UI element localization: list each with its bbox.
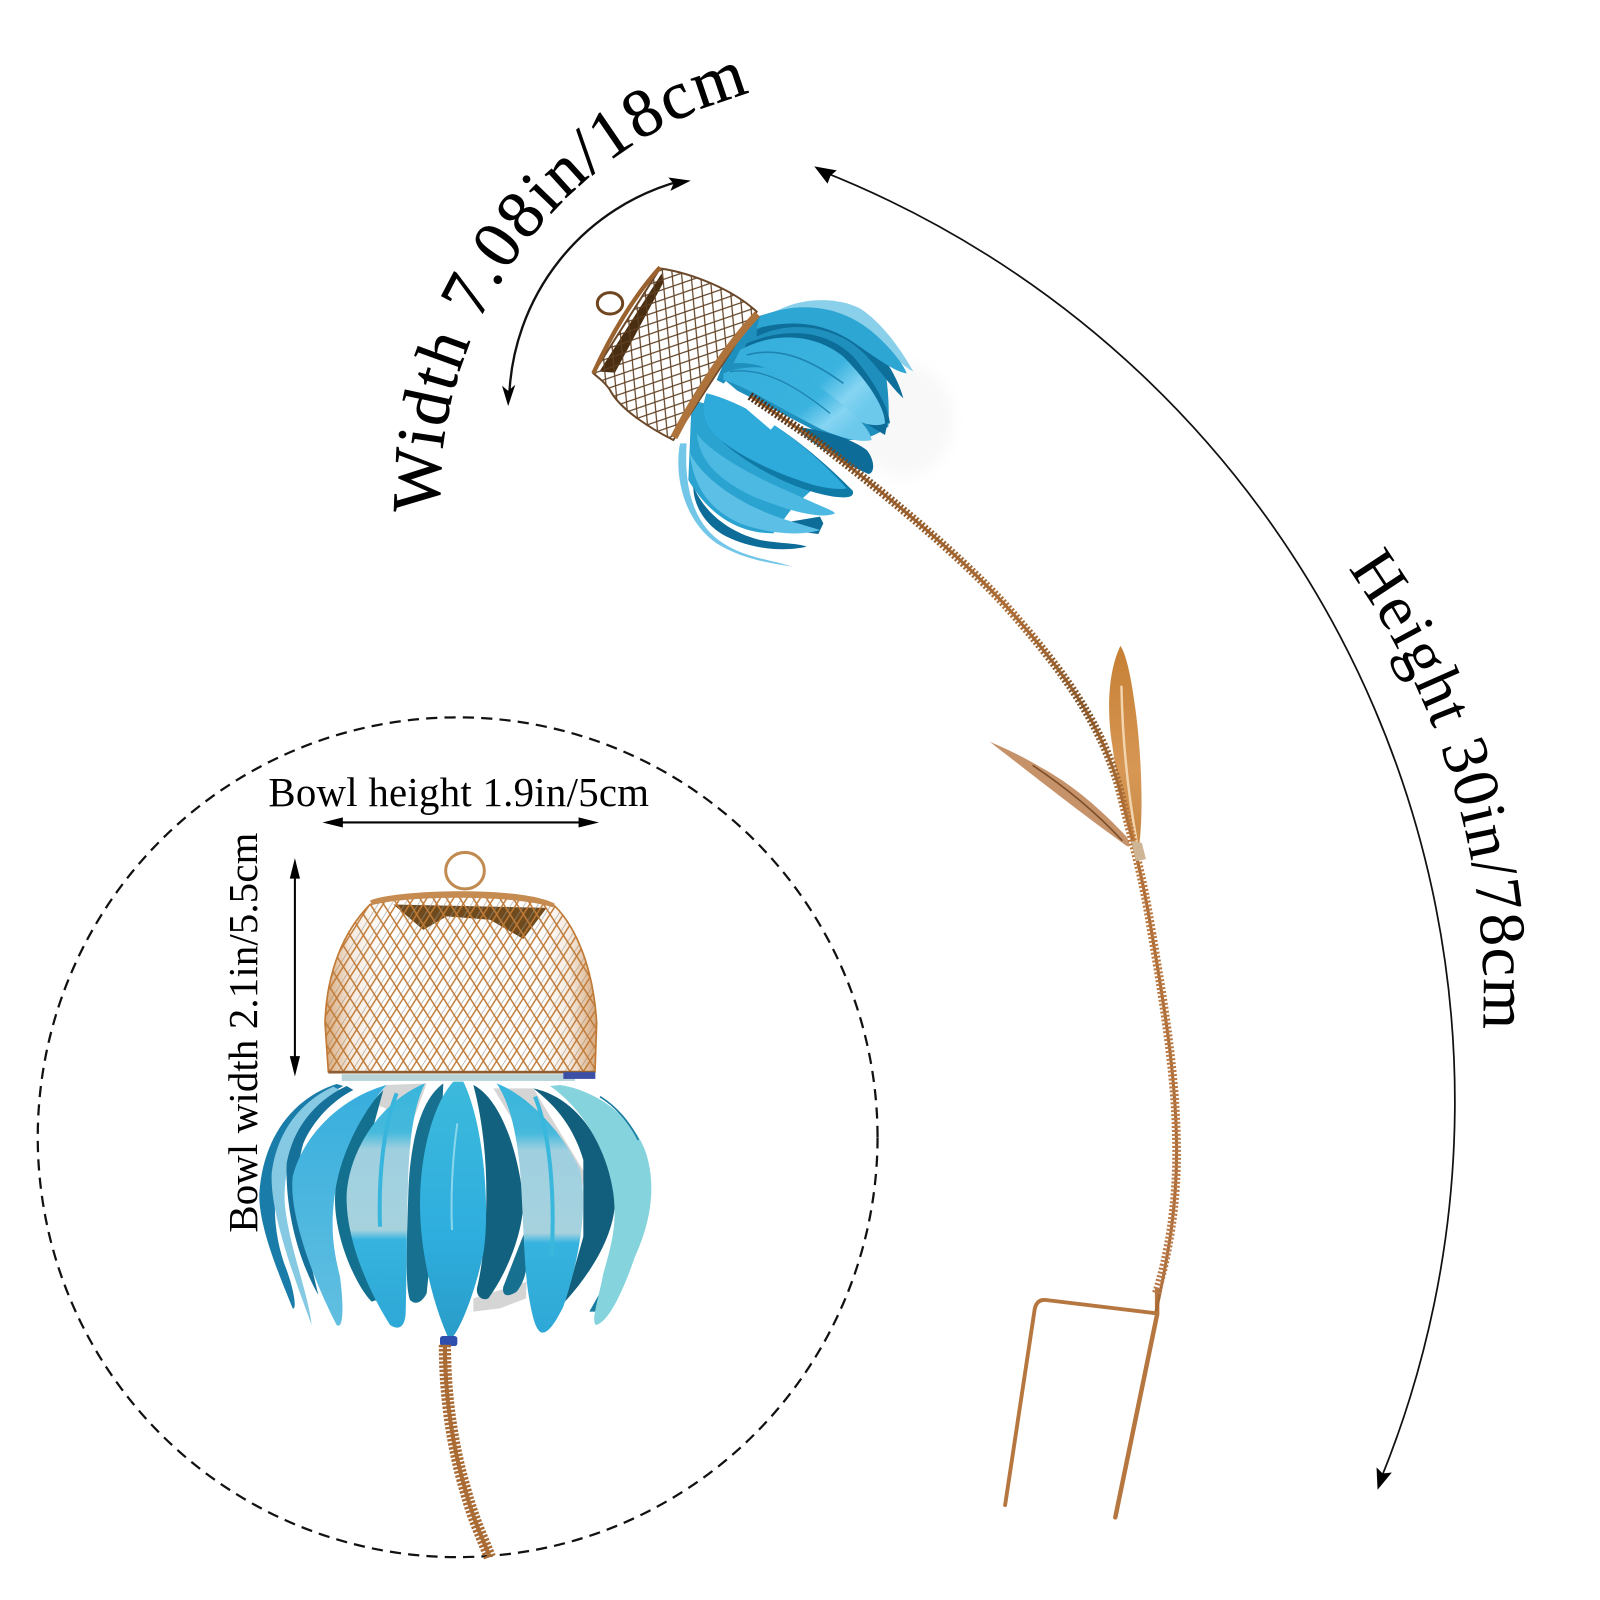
hanging ring bbox=[446, 852, 484, 889]
label: height: Height 30in/78cm bbox=[1349, 546, 1524, 1028]
far left petals bbox=[259, 1084, 387, 1326]
bottom spring stem bbox=[445, 1345, 490, 1557]
dome lid bbox=[370, 891, 555, 907]
mesh cage bbox=[593, 268, 757, 440]
height arc arrow bbox=[814, 166, 1455, 1490]
right pale petal bbox=[497, 1083, 583, 1333]
central dark petals bbox=[473, 1085, 527, 1299]
label: bowl height: Bowl height 1.9in/5cm bbox=[268, 770, 649, 815]
leaf: upright bbox=[1109, 646, 1142, 855]
label: width: Width 7.08in/18cm bbox=[394, 65, 750, 512]
left pale petal bbox=[335, 1083, 425, 1328]
dome body bbox=[325, 895, 597, 1072]
bottom flower petals bbox=[259, 1082, 651, 1346]
upper petals bbox=[717, 300, 913, 441]
top flower feeder bbox=[593, 267, 953, 567]
leaf: left bbox=[990, 742, 1130, 846]
stem with spring bbox=[750, 396, 1177, 1311]
dome base band bbox=[328, 1071, 595, 1081]
arrow: bowl width bbox=[290, 858, 300, 1077]
leaf collar bbox=[1132, 841, 1146, 861]
gap beside the spring bbox=[723, 384, 773, 427]
hanging ring bbox=[597, 293, 623, 314]
stake bbox=[1005, 1290, 1157, 1517]
dashed detail circle bbox=[38, 717, 878, 1557]
left dark petal bbox=[407, 1083, 443, 1303]
cage rim bbox=[593, 267, 660, 373]
central petal bbox=[420, 1082, 486, 1340]
bottom flower mesh dome bbox=[325, 852, 597, 1081]
label: bowl width: Bowl width 2.1in/5.5cm bbox=[221, 832, 266, 1233]
lower petals bbox=[678, 393, 873, 567]
far right petals bbox=[533, 1085, 651, 1325]
grey gaps bbox=[350, 1083, 585, 1312]
width arc arrow bbox=[502, 178, 691, 406]
arrow: bowl height bbox=[322, 817, 599, 828]
cage ring band bbox=[674, 314, 757, 437]
blue wire wrap bbox=[440, 1336, 457, 1346]
soft shadow bbox=[853, 363, 953, 477]
